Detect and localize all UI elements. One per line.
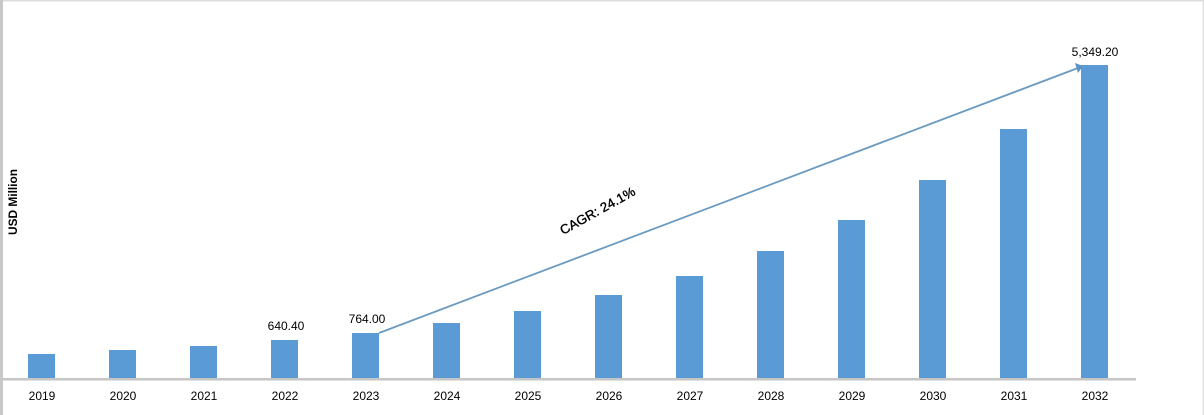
x-axis year labels: 2030 [920, 389, 947, 403]
x-axis year labels: 2028 [758, 389, 785, 403]
x-axis year labels: 2031 [1001, 389, 1028, 403]
x-axis year labels [29, 389, 1109, 403]
x-axis year labels: 2019 [29, 389, 56, 403]
value labels: 764.00 [349, 312, 386, 326]
bars [28, 65, 1108, 378]
x-axis year labels: 2026 [596, 389, 623, 403]
x-axis year labels: 2027 [677, 389, 704, 403]
x-axis year labels: 2022 [272, 389, 299, 403]
x-axis line [3, 378, 1136, 380]
x-axis year labels: 2021 [191, 389, 218, 403]
y-axis title: USD Million [6, 169, 20, 235]
x-axis year labels: 2020 [110, 389, 137, 403]
value labels: 640.40 [268, 319, 305, 333]
value labels: 5,349.20 [1072, 45, 1119, 59]
x-axis year labels: 2032 [1082, 389, 1109, 403]
x-axis year labels: 2029 [839, 389, 866, 403]
x-axis year labels: 2025 [515, 389, 542, 403]
CAGR arrow [379, 63, 1083, 333]
x-axis year labels: 2023 [353, 389, 380, 403]
x-axis year labels: 2024 [434, 389, 461, 403]
value labels [268, 45, 1119, 333]
CAGR label: CAGR: 24.1% [557, 184, 638, 238]
